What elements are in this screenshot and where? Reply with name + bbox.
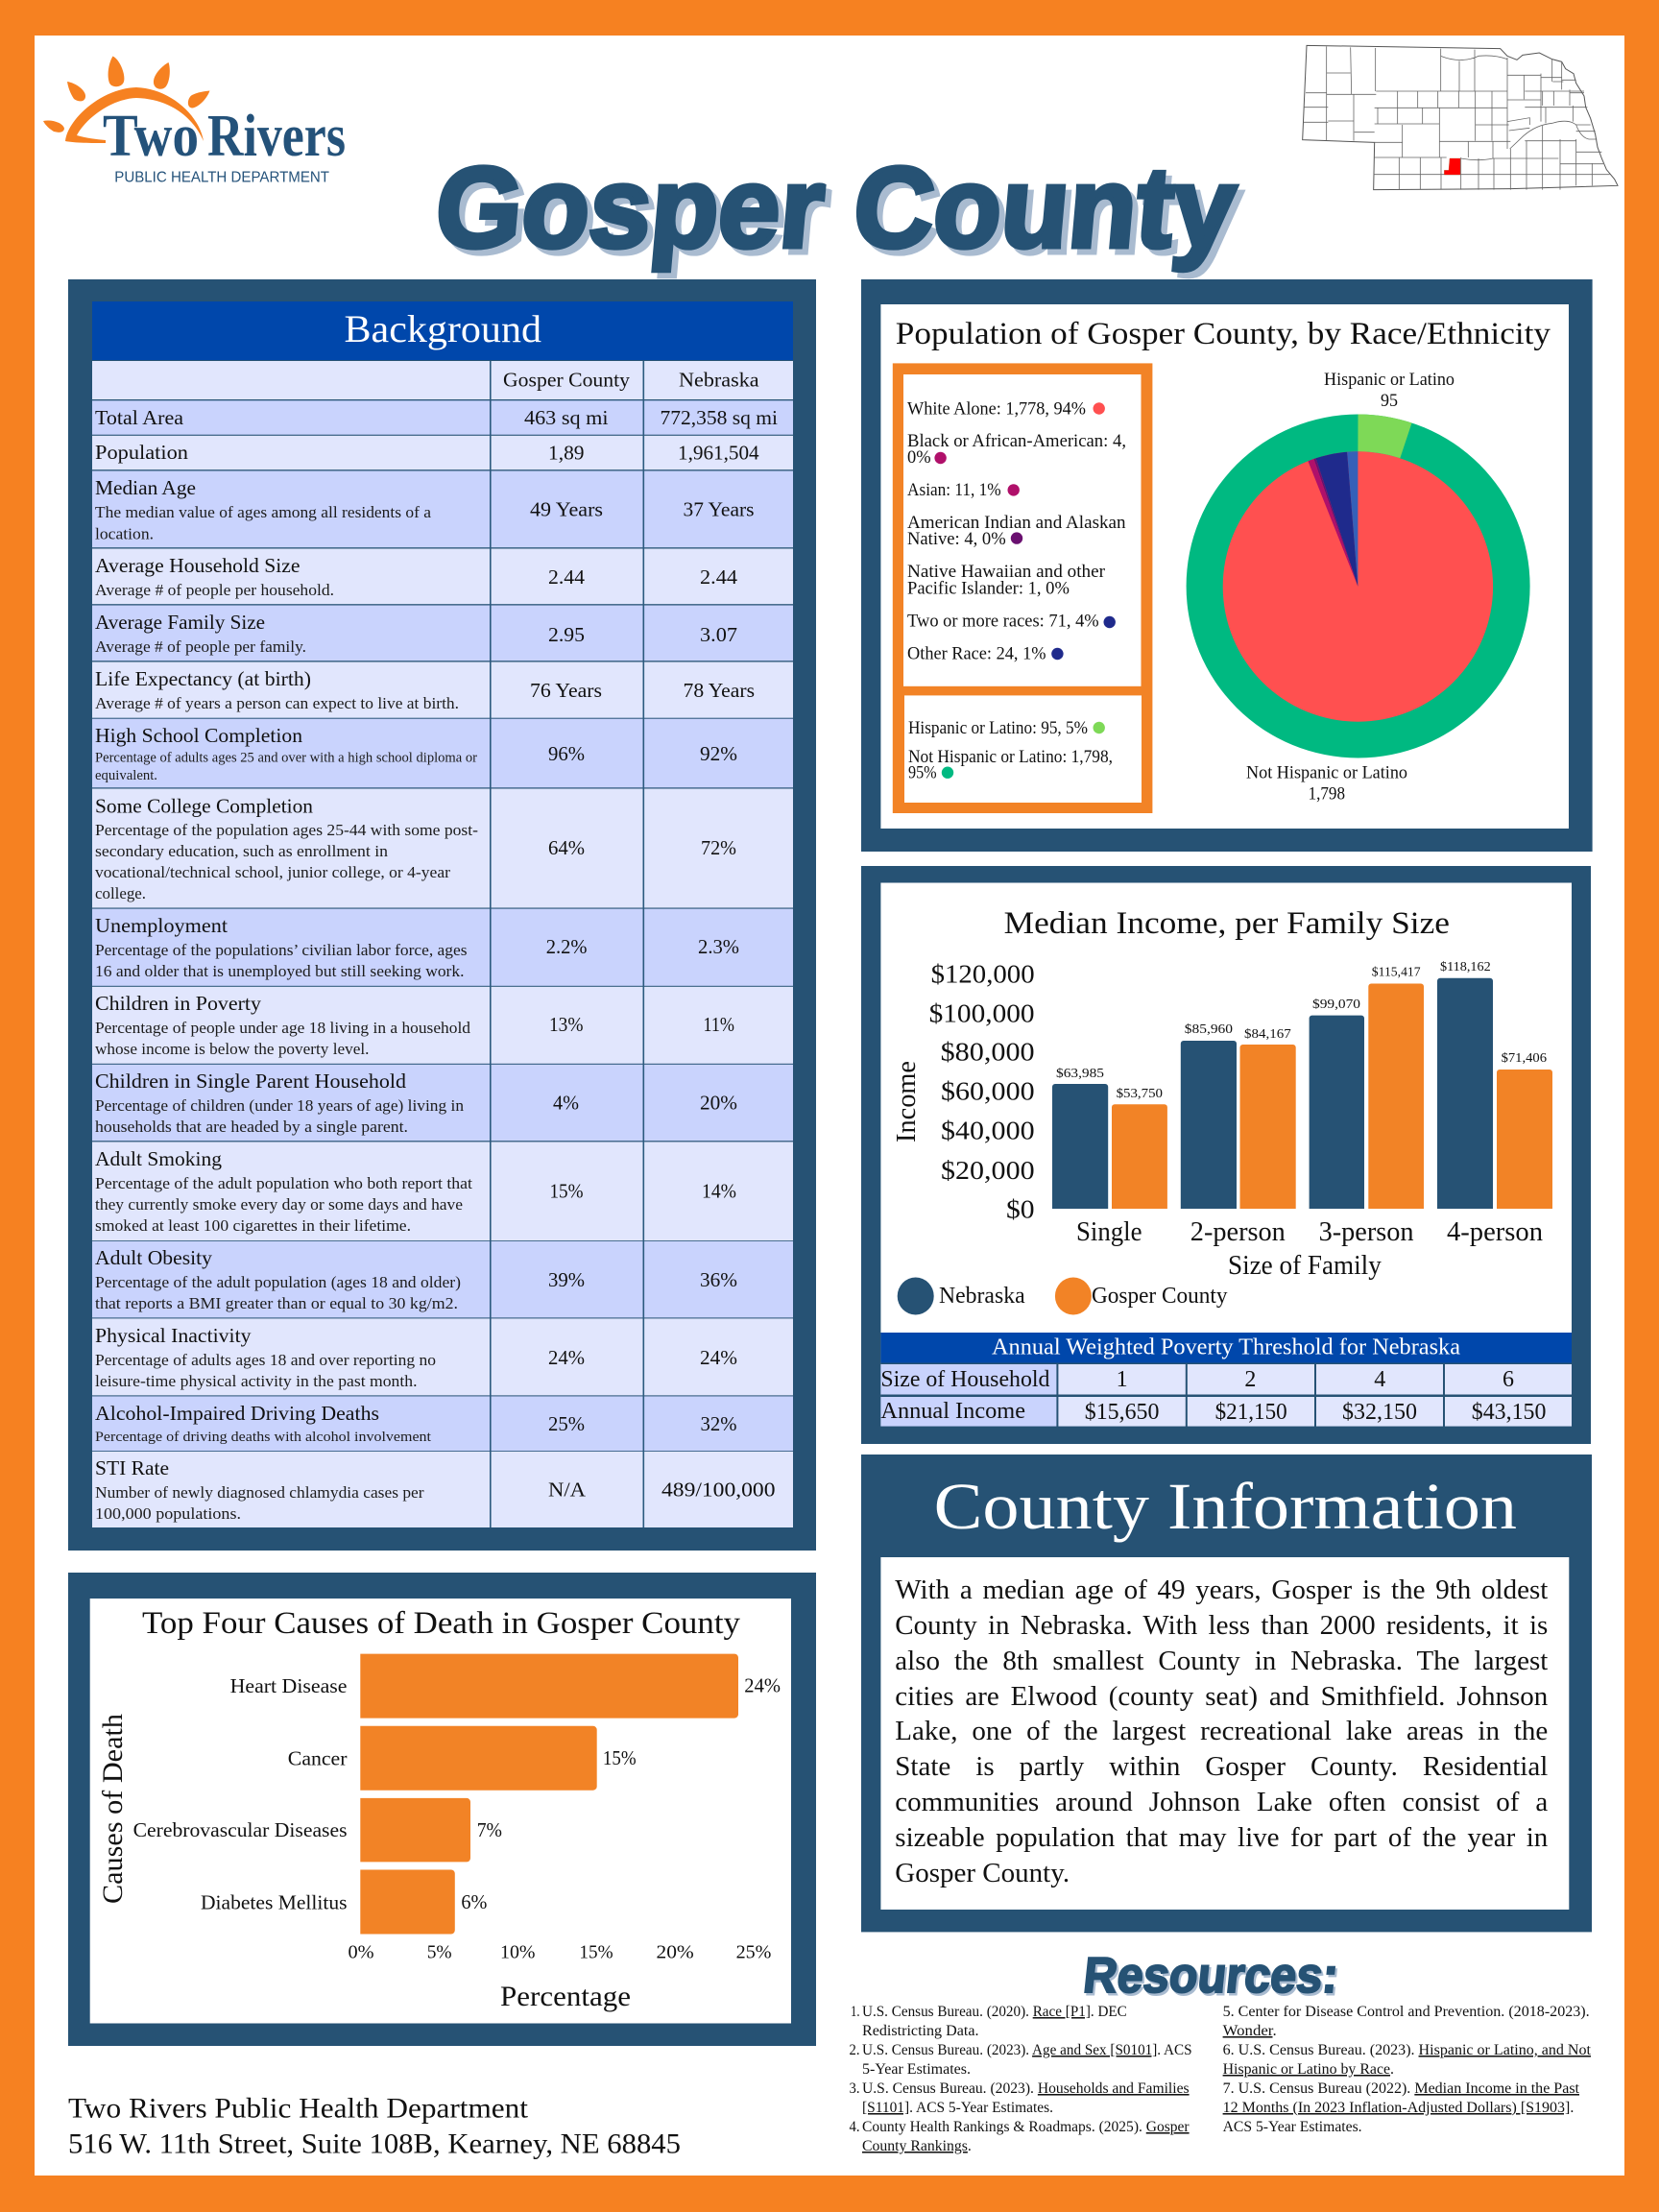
text block: county description: Lake, one of the largest recreational lake areas in the bbox=[895, 1716, 1548, 1746]
row: children in poverty: 13% bbox=[549, 1013, 584, 1036]
legend: income chart bbox=[898, 1277, 1227, 1315]
bar chart: median income: 4-person bbox=[1447, 1217, 1543, 1247]
row: children in poverty bbox=[92, 987, 793, 1064]
row: average family size: Average # of people per family. bbox=[95, 637, 306, 656]
row: unemployment: Unemployment bbox=[95, 914, 228, 937]
legend: race and ethnicity: Native Hawaiian and other bbox=[907, 563, 1105, 582]
logo: Two Rivers Public Health Department: PUBLIC HEALTH DEPARTMENT bbox=[114, 169, 329, 185]
row: adult smoking: 14% bbox=[702, 1179, 736, 1202]
row: alcohol-impaired driving deaths: Alcohol-Impaired Driving Deaths bbox=[95, 1402, 379, 1425]
bar chart: causes of death: 5% bbox=[427, 1941, 452, 1962]
bar chart: median income: $53,750 bbox=[1117, 1087, 1163, 1101]
row: unemployment: 16 and older that is unemployed but still seeking work. bbox=[95, 962, 464, 980]
legend: race and ethnicity: White Alone: 1,778, 94% bbox=[907, 400, 1086, 420]
table: poverty threshold: 1 bbox=[1117, 1367, 1128, 1392]
row: total area: 772,358 sq mi bbox=[661, 406, 778, 429]
text block: resources list left: County Rankings. bbox=[862, 2138, 972, 2154]
row: STI rate: Number of newly diagnosed chlamydia cases per bbox=[95, 1483, 424, 1502]
bar chart: median income: $60,000 bbox=[941, 1077, 1035, 1106]
table: poverty threshold bbox=[880, 1333, 1572, 1427]
title: Gosper County bbox=[437, 150, 1246, 277]
text block: resources list left: 2. bbox=[849, 2042, 860, 2058]
row: STI rate bbox=[92, 1452, 793, 1527]
bar chart: median income: $63,985 bbox=[1056, 1067, 1104, 1081]
row: column headers bbox=[92, 361, 793, 399]
text block: resources list left: 3. bbox=[849, 2080, 860, 2097]
row: some college completion bbox=[92, 789, 793, 908]
row: some college completion: secondary education, such as enrollment in bbox=[95, 842, 388, 860]
text block: county description: State is partly within Gosper County. Residential bbox=[895, 1751, 1548, 1782]
row: children in single parent household bbox=[92, 1065, 793, 1141]
bar chart: causes of death: 15% bbox=[603, 1746, 637, 1769]
row: adult obesity bbox=[92, 1241, 793, 1317]
row: some college completion: 64% bbox=[548, 836, 585, 859]
text block: county description: County in Nebraska. With less than 2000 residents, it is bbox=[895, 1610, 1548, 1641]
row: STI rate: N/A bbox=[548, 1479, 587, 1502]
table: poverty threshold: Annual Weighted Poverty Threshold for Nebraska bbox=[992, 1334, 1460, 1359]
row: children in poverty: 11% bbox=[703, 1013, 734, 1036]
table: poverty threshold: $21,150 bbox=[1215, 1400, 1287, 1425]
bar chart: causes of death: 15% bbox=[579, 1941, 613, 1962]
row: STI rate: STI Rate bbox=[95, 1456, 169, 1479]
row: high school completion: High School Completion bbox=[95, 724, 303, 747]
logo: Two Rivers Public Health Department: Two bbox=[103, 104, 199, 169]
row: unemployment: Percentage of the populations’ civilian labor force, ages bbox=[95, 941, 467, 959]
row: children in single parent household: 4% bbox=[553, 1091, 579, 1114]
legend: race and ethnicity: Native: 4, 0% bbox=[907, 530, 1006, 549]
bar chart: causes of death: Cerebrovascular Diseases bbox=[133, 1818, 348, 1841]
row: STI rate: 489/100,000 bbox=[661, 1479, 776, 1502]
axis title: percentage: Percentage bbox=[500, 1982, 631, 2012]
row: adult obesity: Adult Obesity bbox=[95, 1246, 213, 1269]
axis title: size of family: Size of Family bbox=[1228, 1250, 1382, 1281]
text block: county description: communities around Johnson Lake often consist of a bbox=[895, 1787, 1548, 1817]
legend: race and ethnicity: American Indian and Alaskan bbox=[907, 514, 1126, 533]
row: median age bbox=[92, 470, 793, 547]
text block: resources list left: 1. bbox=[851, 2004, 860, 2020]
panel: county information bbox=[861, 1455, 1592, 1932]
row: children in poverty: Children in Poverty bbox=[95, 992, 262, 1015]
bar chart: causes of death: 20% bbox=[657, 1941, 694, 1962]
row: median age: 49 Years bbox=[530, 497, 603, 520]
bar chart: median income: $40,000 bbox=[941, 1117, 1035, 1145]
row: life expectancy: Average # of years a person can expect to live at birth. bbox=[95, 694, 459, 712]
text block: resources list right: Hispanic or Latino by Race . bbox=[1223, 2061, 1394, 2078]
row: average household size: Average Household Size bbox=[95, 554, 300, 577]
text block: resources list left: U.S. Census Bureau. (2023). Households and Families bbox=[862, 2080, 1190, 2097]
row: median age: Median Age bbox=[95, 476, 196, 499]
row: alcohol-impaired driving deaths bbox=[92, 1396, 793, 1451]
panel: median income per family size bbox=[861, 866, 1591, 1444]
bar chart: median income: $120,000 bbox=[931, 960, 1035, 989]
text block: resources list right: ACS 5-Year Estimates. bbox=[1223, 2119, 1362, 2135]
row: alcohol-impaired driving deaths: 32% bbox=[701, 1412, 737, 1435]
row: high school completion: equivalent. bbox=[95, 768, 157, 783]
row: some college completion: 72% bbox=[701, 836, 736, 859]
legend: race and ethnicity: Hispanic or Latino: 95, 5% bbox=[908, 719, 1088, 738]
heading: resources: Resources: bbox=[1083, 1951, 1343, 2006]
row: column headers: Gosper County bbox=[503, 369, 631, 392]
row: life expectancy: Life Expectancy (at birth) bbox=[95, 667, 311, 690]
legend: race and ethnicity: Pacific Islander: 1, 0% bbox=[907, 579, 1070, 598]
bar chart: causes of death bbox=[133, 1654, 781, 1962]
row: population: Population bbox=[95, 441, 189, 464]
legend: race and ethnicity: Black or African-American: 4, bbox=[907, 432, 1126, 451]
heading: resources: Resources: bbox=[1081, 1948, 1341, 2004]
axis title: income: Income bbox=[892, 1061, 922, 1142]
text block: resources list right: 5. Center for Disease Control and Prevention. (2018-2023). bbox=[1223, 2004, 1590, 2020]
row: adult smoking: Percentage of the adult population who both report that bbox=[95, 1174, 472, 1192]
row: children in single parent household: 20% bbox=[700, 1091, 737, 1114]
bar chart: median income: $85,960 bbox=[1185, 1022, 1233, 1037]
row: high school completion: 96% bbox=[548, 742, 585, 765]
row: physical inactivity: Physical Inactivity bbox=[95, 1324, 252, 1347]
row: alcohol-impaired driving deaths: Percentage of driving deaths with alcohol involvement bbox=[95, 1430, 431, 1445]
bar chart: causes of death: 25% bbox=[736, 1941, 771, 1962]
bar chart: median income: 2-person bbox=[1190, 1217, 1286, 1247]
text block: resources list left: County Health Rankings & Roadmaps. (2025). Gosper bbox=[862, 2119, 1190, 2135]
map of Nebraska with Gosper County highlighted bbox=[1303, 45, 1618, 190]
text block: resources list left: 5-Year Estimates. bbox=[862, 2061, 971, 2078]
table: poverty threshold: $32,150 bbox=[1342, 1400, 1417, 1425]
row: children in poverty: whose income is below the poverty level. bbox=[95, 1040, 369, 1058]
icon: sun rays and arc bbox=[43, 56, 209, 143]
legend: race and ethnicity: Other Race: 24, 1% bbox=[907, 645, 1046, 664]
row: adult smoking: smoked at least 100 cigarettes in their lifetime. bbox=[95, 1216, 411, 1235]
text block: resources list right: 6. U.S. Census Bureau. (2023). Hispanic or Latino, and Not bbox=[1223, 2042, 1592, 2058]
row: physical inactivity: Percentage of adults ages 18 and over reporting no bbox=[95, 1351, 436, 1369]
row: average household size bbox=[92, 549, 793, 604]
text block: resources list left: Redistricting Data. bbox=[862, 2023, 979, 2039]
row: life expectancy: 76 Years bbox=[530, 679, 602, 702]
bar chart: causes of death: Cancer bbox=[288, 1747, 348, 1770]
bar chart: median income: $118,162 bbox=[1440, 960, 1491, 974]
row: population: 1,961,504 bbox=[678, 442, 759, 465]
chart: nested pie of race and ethnicity: Not Hispanic or Latino bbox=[1246, 764, 1407, 783]
row: children in single parent household: households that are headed by a single parent. bbox=[95, 1118, 408, 1136]
bar chart: causes of death: 6% bbox=[461, 1890, 487, 1913]
row: adult smoking: Adult Smoking bbox=[95, 1147, 223, 1170]
row: total area: 463 sq mi bbox=[524, 406, 609, 429]
row: total area bbox=[92, 400, 793, 435]
text block: county description: cities are Elwood (county seat) and Smithfield. Johnson bbox=[895, 1681, 1548, 1712]
heading: Background bbox=[92, 301, 793, 360]
bar chart: median income: $0 bbox=[1006, 1195, 1035, 1224]
text block: county description: sizeable population that may live for part of the year in bbox=[895, 1822, 1548, 1853]
legend: income chart: Gosper County bbox=[1092, 1284, 1227, 1309]
text block: county description: Gosper County. bbox=[895, 1858, 1070, 1888]
footer: address block bbox=[68, 2093, 681, 2160]
row: average family size: Average Family Size bbox=[95, 611, 265, 634]
heading: population by race: Population of Gosper County, by Race/Ethnicity bbox=[896, 317, 1551, 351]
row: high school completion: 92% bbox=[700, 742, 737, 765]
row: high school completion bbox=[92, 719, 793, 787]
legend: race and ethnicity: Asian: 11, 1% bbox=[907, 481, 1001, 500]
legend: income chart: Nebraska bbox=[939, 1284, 1025, 1309]
row: some college completion: vocational/technical school, junior college, or 4-year bbox=[95, 863, 451, 881]
row: unemployment: 2.3% bbox=[698, 935, 739, 958]
heading: county information: County Information bbox=[934, 1470, 1517, 1543]
row: unemployment bbox=[92, 909, 793, 986]
row: children in single parent household: Children in Single Parent Household bbox=[95, 1070, 407, 1093]
text block: resources list right: 7. U.S. Census Bureau (2022). Median Income in the Past bbox=[1223, 2080, 1580, 2097]
panel: population by race and ethnicity bbox=[861, 279, 1593, 852]
text block: county description: also the 8th smallest County in Nebraska. The largest bbox=[895, 1646, 1548, 1676]
bar chart: causes of death: 24% bbox=[744, 1674, 781, 1697]
row: physical inactivity bbox=[92, 1318, 793, 1395]
bar chart: causes of death: Heart Disease bbox=[230, 1674, 348, 1697]
heading: causes of death: Top Four Causes of Death in Gosper County bbox=[142, 1606, 741, 1641]
chart: nested pie of race and ethnicity: 1,798 bbox=[1309, 785, 1345, 805]
text block: resources list right bbox=[1223, 2004, 1592, 2135]
panel: background table bbox=[68, 279, 816, 1551]
table: poverty threshold: 2 bbox=[1244, 1367, 1256, 1392]
row: average family size: 3.07 bbox=[700, 623, 737, 646]
bar chart: median income: $80,000 bbox=[941, 1037, 1035, 1066]
row: adult smoking bbox=[92, 1142, 793, 1240]
row: children in single parent household: Percentage of children (under 18 years of age) living in bbox=[95, 1096, 464, 1115]
row: unemployment: 2.2% bbox=[546, 935, 588, 958]
row: physical inactivity: 24% bbox=[700, 1346, 737, 1369]
table: poverty threshold: $15,650 bbox=[1085, 1400, 1159, 1425]
text block: resources list left bbox=[849, 2004, 1192, 2154]
bar chart: median income: $99,070 bbox=[1312, 998, 1360, 1012]
bar chart: median income: $115,417 bbox=[1372, 966, 1421, 980]
heading: median income: Median Income, per Family Size bbox=[1004, 906, 1450, 941]
footer: address block: Two Rivers Public Health Department bbox=[68, 2093, 529, 2124]
row: total area: Total Area bbox=[95, 406, 184, 429]
table: poverty threshold: Size of Household bbox=[880, 1367, 1049, 1392]
bar chart: median income: $20,000 bbox=[941, 1156, 1035, 1185]
table: poverty threshold: Annual Income bbox=[880, 1399, 1025, 1424]
text block: resources list left: [S1101]. ACS 5-Year Estimates. bbox=[862, 2100, 1053, 2116]
row: average household size: Average # of people per household. bbox=[95, 581, 334, 599]
logo: Two Rivers Public Health Department: Rivers bbox=[207, 104, 346, 169]
text block: resources list left: 4. bbox=[849, 2119, 860, 2135]
text block: county description bbox=[895, 1573, 1548, 1899]
row: column headers: Nebraska bbox=[679, 369, 759, 392]
row: some college completion: college. bbox=[95, 884, 146, 902]
bar chart: median income: 3-person bbox=[1319, 1217, 1414, 1247]
row: median age: The median value of ages among all residents of a bbox=[95, 503, 432, 521]
bar chart: causes of death: Diabetes Mellitus bbox=[201, 1890, 348, 1913]
chart: nested pie of race and ethnicity: Hispanic or Latino bbox=[1324, 371, 1455, 390]
row: average household size: 2.44 bbox=[700, 565, 738, 589]
row: physical inactivity: leisure-time physical activity in the past month. bbox=[95, 1372, 417, 1390]
legend: race and ethnicity: 95% bbox=[908, 764, 937, 783]
panel: top four causes of death bbox=[68, 1573, 816, 2046]
bar chart: causes of death: 0% bbox=[348, 1941, 374, 1962]
chart: nested pie of race and ethnicity bbox=[1187, 371, 1530, 805]
row: some college completion: Percentage of the population ages 25-44 with some post- bbox=[95, 821, 478, 839]
bar chart: causes of death: 10% bbox=[500, 1941, 536, 1962]
text block: resources list left: U.S. Census Bureau. (2023). Age and Sex [S0101]. ACS bbox=[862, 2042, 1192, 2058]
bar chart: median income: $100,000 bbox=[929, 998, 1035, 1027]
title: Gosper County bbox=[431, 144, 1240, 272]
text block: resources list left: U.S. Census Bureau. (2020). Race [P1]. DEC bbox=[862, 2004, 1127, 2020]
row: adult obesity: that reports a BMI greater than or equal to 30 kg/m2. bbox=[95, 1294, 458, 1312]
row: life expectancy: 78 Years bbox=[684, 679, 755, 702]
heading: Background: Background bbox=[344, 307, 541, 350]
row: median age: location. bbox=[95, 524, 154, 542]
row: population: 1,89 bbox=[548, 442, 584, 465]
row: adult smoking: they currently smoke every day or some days and have bbox=[95, 1195, 463, 1214]
table: poverty threshold: 6 bbox=[1503, 1367, 1514, 1392]
text block: resources list right: 12 Months (In 2023 Inflation-Adjusted Dollars) [S1903] . bbox=[1223, 2100, 1574, 2116]
row: average family size bbox=[92, 605, 793, 661]
row: STI rate: 100,000 populations. bbox=[95, 1504, 241, 1523]
row: adult obesity: 36% bbox=[700, 1268, 737, 1291]
bar chart: causes of death: 7% bbox=[477, 1818, 502, 1841]
row: some college completion: Some College Completion bbox=[95, 795, 313, 818]
bar chart: median income bbox=[929, 960, 1552, 1247]
bar chart: median income: $84,167 bbox=[1244, 1027, 1291, 1042]
bar chart: median income: Single bbox=[1076, 1217, 1142, 1247]
legend: race and ethnicity: 0% bbox=[907, 448, 931, 468]
row: high school completion: Percentage of adults ages 25 and over with a high school diploma or bbox=[95, 751, 477, 766]
table: poverty threshold: $43,150 bbox=[1472, 1400, 1546, 1425]
row: median age: 37 Years bbox=[684, 497, 755, 520]
row: physical inactivity: 24% bbox=[548, 1346, 585, 1369]
row: adult obesity: Percentage of the adult population (ages 18 and older) bbox=[95, 1273, 461, 1291]
row: adult smoking: 15% bbox=[549, 1179, 584, 1202]
chart: nested pie of race and ethnicity: 95 bbox=[1381, 392, 1398, 411]
axis title: causes of death: Causes of Death bbox=[97, 1714, 129, 1904]
row: alcohol-impaired driving deaths: 25% bbox=[548, 1412, 585, 1435]
bar chart: median income: $71,406 bbox=[1502, 1051, 1547, 1066]
legend: race and ethnicity bbox=[893, 363, 1152, 813]
row: average family size: 2.95 bbox=[548, 623, 585, 646]
legend: race and ethnicity: Not Hispanic or Latino: 1,798, bbox=[908, 748, 1113, 767]
row: population bbox=[92, 436, 793, 469]
row: adult obesity: 39% bbox=[548, 1268, 585, 1291]
text block: county description: With a median age of 49 years, Gosper is the 9th oldest bbox=[895, 1575, 1548, 1605]
legend: race and ethnicity: Two or more races: 71, 4% bbox=[907, 612, 1099, 631]
footer: address block: 516 W. 11th Street, Suite 108B, Kearney, NE 68845 bbox=[68, 2128, 681, 2160]
row: life expectancy bbox=[92, 662, 793, 718]
text block: resources list right: Wonder . bbox=[1223, 2023, 1277, 2039]
row: average household size: 2.44 bbox=[548, 565, 586, 589]
row: children in poverty: Percentage of people under age 18 living in a household bbox=[95, 1019, 471, 1037]
logo: Two Rivers Public Health Department bbox=[43, 56, 346, 185]
table: poverty threshold: 4 bbox=[1374, 1367, 1385, 1392]
